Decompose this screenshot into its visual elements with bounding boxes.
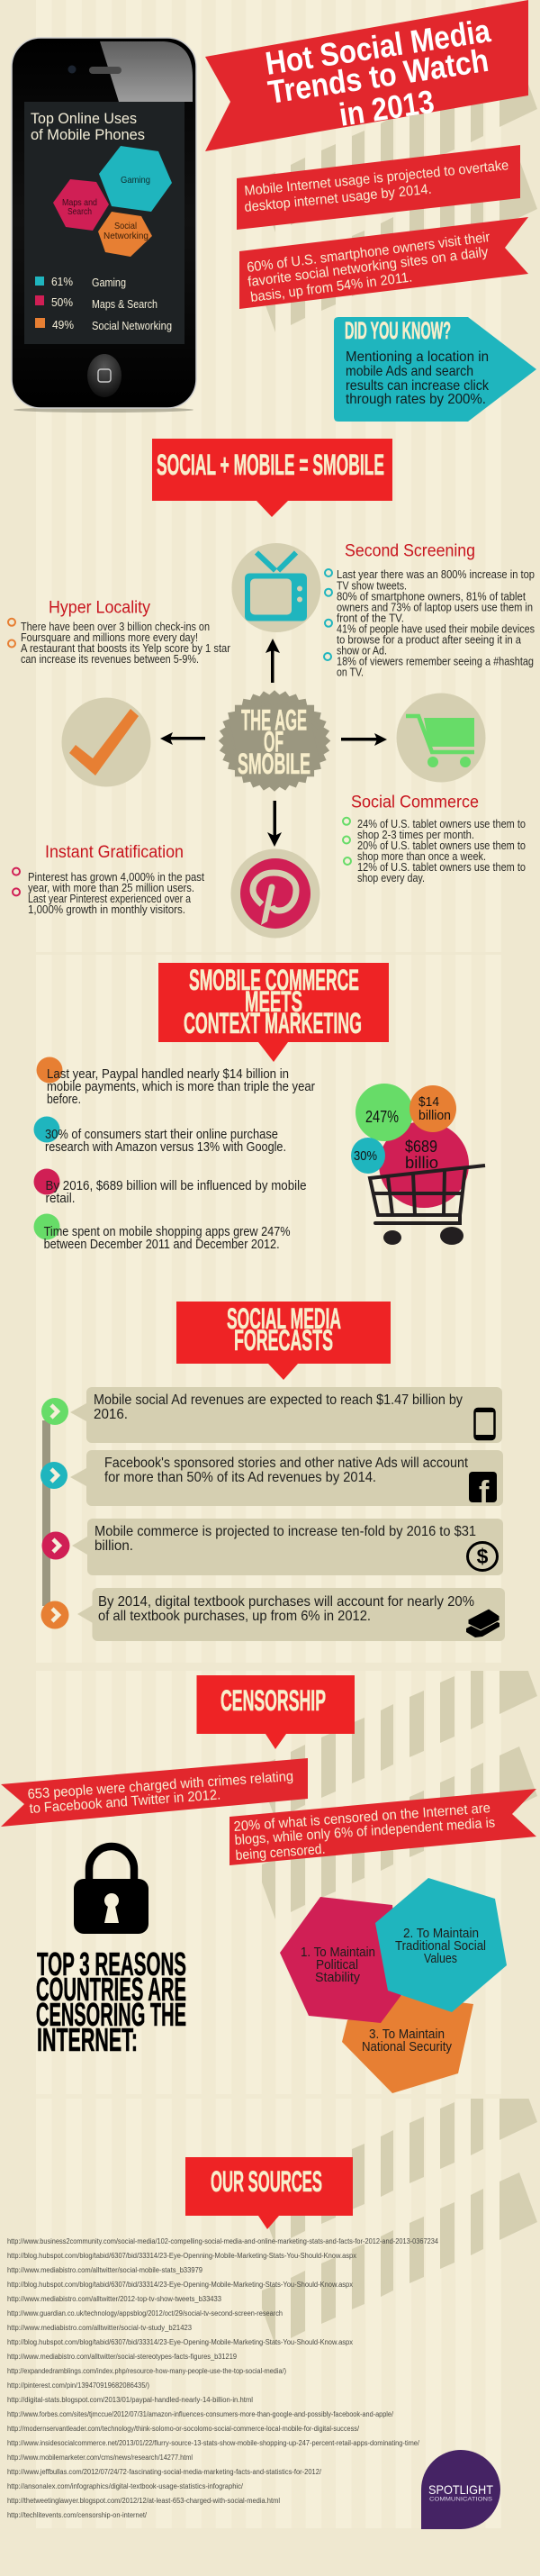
text: hyper locality: Foursquare and millions more every day! <box>21 631 198 644</box>
forecast 3: Mobile commerce is projected to increase ten-fold by 2016 to $31 <box>94 1524 476 1539</box>
heading: our sources: OUR SOURCES <box>211 2165 322 2198</box>
title ribbon <box>205 0 528 151</box>
list: source urls: http://ansonalex.com/infographics/digital-textbook-usage-statistics-infographic/ <box>7 2482 244 2490</box>
heading: social media forecasts <box>176 1302 391 1380</box>
phone legend: Social Networking <box>92 319 172 332</box>
list: source urls: http://www.jeffbullas.com/2012/07/24/72-fascinating-social-media-marketing-facts-and-statistics-for-2012/ <box>7 2468 322 2476</box>
ribbon: mobile internet usage: Mobile Internet usage is projected to overtake <box>244 158 509 199</box>
icon: padlock <box>74 1846 148 1934</box>
heading: top 3 reasons: COUNTRIES ARE <box>36 1971 186 2008</box>
text: second screening: show or Ad. <box>337 645 387 658</box>
panel: phone with top online uses <box>12 38 196 413</box>
text: second screening: front of the TV. <box>337 612 404 624</box>
hexagon chart <box>53 146 172 257</box>
ribbon: 653 people charged: to Facebook and Twitter in 2012. <box>29 1787 221 1817</box>
list: commerce facts: before. <box>47 1093 81 1107</box>
forecast 2: for more than 50% of its Ad revenues by 2014. <box>104 1470 376 1485</box>
list: source urls <box>7 2237 439 2519</box>
heading: top 3 reasons <box>36 1946 186 2058</box>
ribbon: mobile internet usage <box>237 145 520 230</box>
heading: social media forecasts: SOCIAL MEDIA <box>227 1302 341 1335</box>
forecast 3: billion. <box>94 1538 133 1554</box>
list: source urls: http://thetweetinglawyer.blogspot.com/2012/12/at-least-653-charged-with-social-media.html <box>7 2497 280 2505</box>
text: instant gratification: Last year Pinterest experienced over a <box>28 893 191 905</box>
badge: the age of smobile: OF <box>264 726 284 758</box>
text: instant gratification: Instant Gratification <box>45 843 184 862</box>
list: source urls: http://blog.hubspot.com/blog/tabid/6307/bid/33314/23-Eye-Opening-Mobile-Marketing-Stats-You-Should-Know.aspx <box>7 2281 353 2289</box>
callout: did you know: mobile Ads and search <box>346 364 473 379</box>
list: commerce facts: mobile payments, which is more than triple the year <box>47 1080 315 1094</box>
hexagon chart: Networking <box>104 231 148 241</box>
icon: dollar <box>468 1542 497 1571</box>
list: source urls: http://expandedramblings.com/index.php/resource-how-many-people-use-the-top-social-media/) <box>7 2367 286 2375</box>
heading: top 3 reasons: INTERNET: <box>37 2021 138 2058</box>
list: source urls: http://www.mediabistro.com/alltwitter/2012-top-tv-show-tweets_b33433 <box>7 2295 222 2303</box>
phone legend: Maps & Search <box>92 297 158 311</box>
list: source urls: http://www.mediabistro.com/alltwitter/social-stereotypes-facts-figures_b31219 <box>7 2353 238 2361</box>
arrow: left <box>160 732 205 745</box>
heading: censorship: CENSORSHIP <box>220 1684 326 1717</box>
list: commerce facts: research with Amazon versus 13% with Google. <box>45 1140 286 1155</box>
ribbon: smartphone owners: favorite social networking sites on a daily <box>247 244 490 290</box>
ribbon: 653 people charged: 653 people were charged with crimes relating <box>27 1769 294 1802</box>
list: source urls: http://www.business2community.com/social-media/102-compelling-social-media-and-online-marketing-stats-and-facts-for-2012-and-2013-0367234 <box>7 2237 439 2245</box>
icon: shopping cart <box>396 694 486 782</box>
text: second screening: TV show tweets. <box>337 579 407 592</box>
text: social commerce: shop every day. <box>357 872 425 884</box>
text: hyper locality <box>8 598 230 666</box>
forecast 1: 2016. <box>94 1407 128 1422</box>
text: second screening: Second Screening <box>345 542 475 560</box>
list: commerce facts: Time spent on mobile shopping apps grew 247% <box>44 1225 291 1239</box>
chart: shopping cart bubbles: 247% <box>365 1108 399 1126</box>
chart: three reasons hexagons: Stability <box>315 1971 361 1985</box>
text: hyper locality: can increase its revenues between 5-9%. <box>21 653 199 666</box>
phone legend: 61% <box>51 275 73 288</box>
arrow: right <box>341 733 387 746</box>
ribbon: smartphone owners: 60% of U.S. smartphone owners visit their <box>246 230 490 276</box>
arrow: up <box>266 639 280 683</box>
forecast 4: By 2014, digital textbook purchases will account for nearly 20% <box>98 1594 474 1610</box>
list: source urls: http://www.mediabistro.com/alltwitter/social-mobile-stats_b33979 <box>7 2266 203 2274</box>
icon: television <box>232 543 320 632</box>
timeline bar <box>42 1420 50 1606</box>
chart: three reasons hexagons: Political <box>316 1958 358 1973</box>
icon: facebook <box>469 1472 497 1510</box>
logo: spotlight communications: COMMUNICATIONS <box>429 2497 492 2502</box>
list: commerce facts <box>34 1057 315 1252</box>
hexagon chart: Search <box>68 206 92 217</box>
icon: dollar: $ <box>477 1545 489 1568</box>
chart: three reasons hexagons: National Security <box>362 2040 453 2054</box>
title ribbon: Hot Social Media <box>263 12 493 82</box>
hexagon chart: Maps and <box>62 197 97 208</box>
list: source urls: http://www.guardian.co.uk/technology/appsblog/2012/oct/29/social-tv-second-screen-research <box>7 2309 283 2317</box>
text: hyper locality: A restaurant that boosts its Yelp score by 1 star <box>21 642 230 655</box>
icon: smartphone <box>475 1409 495 1439</box>
heading: top 3 reasons: CENSORING THE <box>36 1996 186 2033</box>
chart: three reasons hexagons: 3. To Maintain <box>369 2027 445 2042</box>
ribbon: smartphone owners <box>239 217 528 309</box>
ribbon: 20 percent censored: blogs, while only 6% of independent media is <box>234 1815 496 1848</box>
text: instant gratification: Pinterest has grown 4,000% in the past <box>28 871 204 884</box>
title ribbon: Trends to Watch <box>266 41 490 111</box>
phone legend: 49% <box>52 318 74 331</box>
list: source urls: http://techlitevents.com/censorship-on-internet/ <box>7 2511 148 2519</box>
ribbon: 20 percent censored: 20% of what is censored on the Internet are <box>233 1800 491 1835</box>
forecast 1: Mobile social Ad revenues are expected to reach $1.47 billion by <box>94 1392 463 1408</box>
list: source urls: http://www.forbes.com/sites/tjmccue/2012/07/31/amazon-influences-consumers-more-than-google-and-possibly-facebook-and-apple/ <box>7 2410 394 2418</box>
forecast 3 <box>41 1519 503 1575</box>
list: commerce facts: between December 2011 and December 2012. <box>44 1238 280 1252</box>
text: social commerce: Social Commerce <box>351 793 479 812</box>
phone heading <box>31 110 145 143</box>
arrow: down <box>267 801 282 847</box>
chart: three reasons hexagons: 1. To Maintain <box>301 1946 375 1960</box>
phone legend: 50% <box>51 295 73 309</box>
text: instant gratification <box>13 843 204 916</box>
chart: shopping cart bubbles: $14 <box>418 1094 439 1110</box>
phone legend: Gaming <box>92 276 126 289</box>
list: source urls: http://digital-stats.blogspot.com/2013/01/paypal-handled-nearly-14-billion-in.html <box>7 2396 253 2404</box>
text: second screening <box>324 542 535 679</box>
list: source urls: http://www.mediabistro.com/alltwitter/social-tv-study_b21423 <box>7 2324 193 2332</box>
text: instant gratification: year, with more than 25 million users. <box>28 882 194 894</box>
text: social commerce <box>343 793 526 884</box>
forecast 4 <box>41 1588 505 1641</box>
icon: pinterest <box>230 848 320 939</box>
badge: the age of smobile: SMOBILE <box>238 748 310 780</box>
phone legend <box>35 275 172 332</box>
phone heading: of Mobile Phones <box>31 126 145 143</box>
callout: did you know: Mentioning a location in <box>346 349 489 365</box>
heading: censorship <box>196 1675 355 1749</box>
chart: three reasons hexagons: Traditional Social <box>395 1939 486 1954</box>
heading: smobile commerce meets context marketing: CONTEXT MARKETING <box>184 1007 362 1039</box>
list: source urls: http://blog.hubspot.com/blog/tabid/6307/bid/33314/23-Eye-Opening-Mobile-Marketing-Stats-You-Should-Know.aspx <box>7 2338 353 2346</box>
badge: the age of smobile: THE AGE <box>241 704 307 737</box>
chart: three reasons hexagons: Values <box>424 1952 457 1966</box>
text: second screening: on TV. <box>337 667 364 679</box>
text: hyper locality: There have been over 3 billion check-ins on <box>21 621 210 633</box>
list: commerce facts: 30% of consumers start their online purchase <box>45 1128 278 1142</box>
forecast 2 <box>40 1450 503 1510</box>
forecast 4: of all textbook purchases, up from 6% in 2012. <box>98 1609 371 1624</box>
callout: did you know <box>334 317 536 422</box>
list: source urls: http://blog.hubspot.com/blog/tabid/6307/bid/33314/23-Eye-Openning-Mobile-Marketing-Stats-You-Should-Know.aspx <box>7 2252 356 2260</box>
text: social commerce: shop more than once a week. <box>357 850 486 863</box>
badge: the age of smobile <box>219 690 330 792</box>
chart: shopping cart bubbles <box>351 1084 485 1245</box>
title ribbon: in 2013 <box>337 83 436 133</box>
chart: shopping cart bubbles: billio <box>405 1154 438 1172</box>
heading: top 3 reasons: TOP 3 REASONS <box>37 1946 186 1982</box>
icon: facebook: f <box>479 1475 490 1510</box>
heading: smobile commerce meets context marketing: MEETS <box>245 985 302 1018</box>
logo: spotlight communications: SPOTLIGHT <box>428 2482 493 2497</box>
text: second screening: 80% of smartphone owners, 81% of tablet <box>337 590 526 603</box>
chart: shopping cart bubbles: 30% <box>354 1148 377 1164</box>
list: commerce facts: Last year, Paypal handled nearly $14 billion in <box>47 1067 289 1082</box>
phone heading: Top Online Uses <box>31 110 137 127</box>
text: second screening: to browse for a product after seeing it in a <box>337 634 521 647</box>
icon: books <box>466 1609 500 1637</box>
list: commerce facts: By 2016, $689 billion will be influenced by mobile <box>45 1179 306 1193</box>
callout: did you know: DID YOU KNOW? <box>345 317 451 344</box>
text: hyper locality: Hyper Locality <box>49 598 150 617</box>
text: instant gratification: 1,000% growth in monthly visitors. <box>28 903 185 916</box>
heading: our sources <box>185 2157 353 2229</box>
callout: did you know: results can increase click <box>346 378 490 394</box>
hexagon chart: Social <box>114 221 137 231</box>
heading: smobile commerce meets context marketing <box>158 963 389 1062</box>
list: commerce facts: retail. <box>45 1192 76 1206</box>
callout: did you know: through rates by 200%. <box>346 392 486 407</box>
heading: social + mobile = smobile <box>152 439 392 517</box>
chart: shopping cart bubbles: $689 <box>405 1138 437 1156</box>
text: social commerce: shop 2-3 times per month. <box>357 829 474 841</box>
ribbon: 20 percent censored: being censored. <box>235 1842 326 1864</box>
list: source urls: http://www.insidesocialcommerce.net/2013/01/22/flurry-source-13-stats-show-mobile-shopping-up-247-percent-retail-apps-dominating-time/ <box>7 2439 420 2447</box>
list: source urls: http://modernservantleader.com/technology/think-solomo-or-socolomo-social-commerce-local-mobile-for-digital-success/ <box>7 2425 360 2433</box>
list: source urls: http://www.mobilemarketer.com/cms/news/research/14277.html <box>7 2454 193 2462</box>
forecast 2: Facebook's sponsored stories and other native Ads will account <box>104 1456 468 1471</box>
ribbon: 20 percent censored <box>230 1789 536 1865</box>
hexagon chart: Gaming <box>121 175 150 186</box>
icon: check mark <box>61 697 151 787</box>
forecast 1 <box>41 1387 502 1443</box>
ribbon: 653 people charged <box>1 1758 308 1827</box>
chart: three reasons hexagons: 2. To Maintain <box>403 1927 479 1941</box>
list: source urls: http://pinterest.com/pin/139470919682086435/) <box>7 2381 149 2390</box>
ribbon: mobile internet usage: desktop internet usage by 2014. <box>244 182 432 215</box>
ribbon: smartphone owners: basis, up from 54% in 2011. <box>249 269 413 305</box>
heading: social media forecasts: FORECASTS <box>234 1324 333 1356</box>
logo: spotlight communications <box>421 2450 500 2529</box>
heading: smobile commerce meets context marketing: SMOBILE COMMERCE <box>189 964 359 996</box>
chart: three reasons hexagons <box>280 1878 507 2093</box>
chart: shopping cart bubbles: billion <box>418 1108 451 1123</box>
